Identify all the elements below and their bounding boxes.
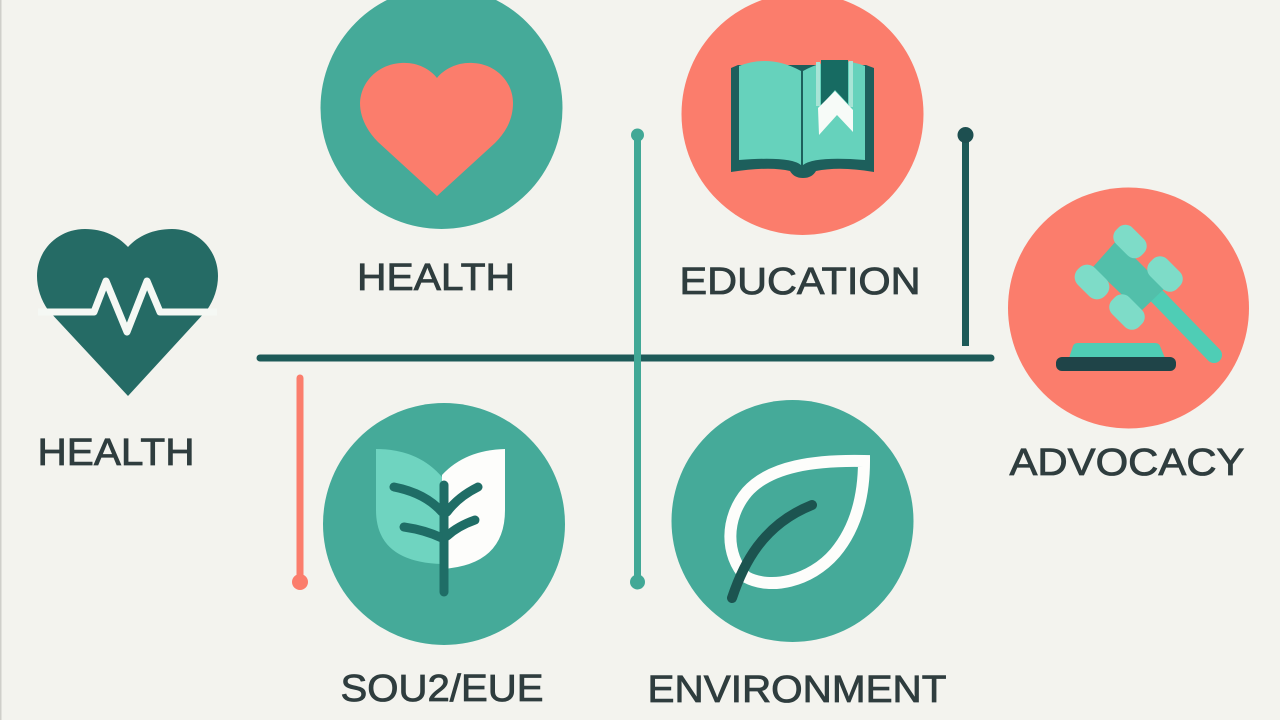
label: advocacy: ADVOCACY — [1010, 442, 1244, 484]
label: health top: HEALTH — [357, 257, 515, 299]
icon: circle with heart — [320, 0, 562, 229]
panel: environment — [648, 400, 946, 711]
icon: circle with open book — [682, 0, 924, 235]
horizontal axis line — [260, 354, 991, 362]
panel: advocacy — [1008, 188, 1249, 484]
label: sou2/eue: SOU2/EUE — [340, 668, 544, 710]
icon: circle with outline leaf — [672, 400, 914, 642]
panel: education — [680, 0, 924, 303]
vertical teal connector — [630, 128, 645, 590]
icon: heart with pulse — [37, 229, 218, 396]
dark connector — [958, 127, 974, 346]
icon: circle with two-tone leaf — [323, 403, 565, 645]
label: health left: HEALTH — [38, 432, 194, 474]
coral connector — [292, 378, 308, 590]
panel: left health — [37, 229, 218, 474]
icon: circle with gavel — [1008, 188, 1249, 428]
label: education: EDUCATION — [680, 261, 920, 303]
panel: top health — [320, 0, 562, 299]
label: environment: ENVIRONMENT — [648, 669, 946, 711]
panel: sou2/eue — [323, 403, 565, 710]
